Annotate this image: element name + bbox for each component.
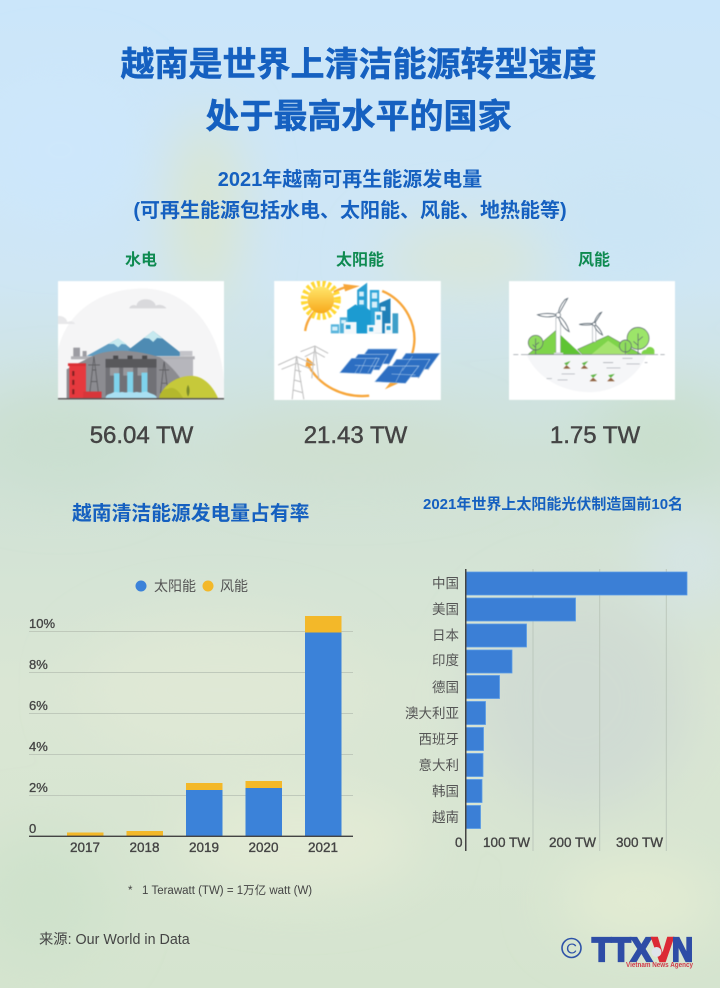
country labels: 中国 bbox=[432, 576, 459, 591]
x axis labels: 2020 bbox=[248, 840, 279, 855]
country labels: 韩国 bbox=[432, 784, 459, 799]
country labels: 德国 bbox=[432, 680, 459, 695]
source: 来源: Our World in Data bbox=[39, 932, 190, 948]
panel: solar power bbox=[274, 251, 442, 449]
heading: share chart: 越南清洁能源发电量占有率 bbox=[72, 503, 309, 525]
y axis labels: 0 bbox=[29, 821, 36, 836]
country labels: 美国 bbox=[432, 602, 459, 617]
bars: wind bbox=[67, 616, 342, 836]
copyright mark bbox=[562, 938, 581, 958]
logo: TTXVN: V bbox=[652, 931, 673, 968]
country labels: 意大利 bbox=[418, 757, 459, 773]
logo: TTXVN: N bbox=[672, 931, 693, 968]
legend: 风能 bbox=[220, 578, 248, 594]
country labels: 西班牙 bbox=[418, 732, 459, 747]
horizontal bar chart: top 10 manufacturers bbox=[405, 569, 688, 851]
icon: hydro dam bbox=[57, 280, 225, 400]
value: wind: 1.75 TW bbox=[550, 422, 640, 449]
heading: top 10 chart: 2021年世界上太阳能光伏制造国前10名 bbox=[423, 496, 683, 513]
x axis labels bbox=[455, 835, 663, 850]
y axis labels: 2% bbox=[29, 780, 48, 795]
country labels: 日本 bbox=[432, 628, 459, 643]
logo: TTXVN bbox=[561, 931, 693, 969]
bars bbox=[466, 572, 687, 828]
country labels: 印度 bbox=[432, 653, 459, 668]
logo: TTXVN: TTX bbox=[592, 931, 652, 968]
x axis labels bbox=[70, 840, 338, 855]
x axis labels: 200 TW bbox=[549, 835, 596, 850]
title bbox=[120, 46, 596, 136]
country labels: 澳大利亚 bbox=[405, 706, 459, 721]
y axis labels: 6% bbox=[29, 698, 48, 713]
icon: wind farm bbox=[508, 280, 676, 400]
y axis labels bbox=[29, 616, 55, 836]
legend bbox=[136, 578, 248, 594]
stacked bar chart: clean energy share bbox=[29, 578, 353, 855]
legend: 太阳能 bbox=[154, 578, 196, 594]
x axis labels: 100 TW bbox=[483, 835, 530, 850]
footnote: * 1 Terawatt (TW) = 1万亿 watt (W) bbox=[128, 885, 312, 897]
x axis labels: 2019 bbox=[189, 840, 219, 855]
bars: solar bbox=[186, 632, 342, 836]
logo: TTXVN: Vietnam News Agency bbox=[626, 962, 693, 969]
title: 越南是世界上清洁能源转型速度 bbox=[120, 46, 596, 84]
subtitle: (可再生能源包括水电、太阳能、风能、地热能等) bbox=[133, 200, 567, 222]
x axis labels: 2017 bbox=[70, 840, 100, 855]
value: solar: 21.43 TW bbox=[304, 422, 407, 449]
y axis labels: 4% bbox=[29, 739, 48, 754]
y axis labels: 10% bbox=[29, 616, 55, 631]
x axis labels: 2018 bbox=[129, 840, 160, 855]
title: 处于最高水平的国家 bbox=[206, 98, 512, 136]
x axis labels: 0 bbox=[455, 835, 463, 850]
panel: wind power bbox=[508, 251, 676, 449]
x axis labels: 2021 bbox=[308, 840, 338, 855]
icon: solar cycle bbox=[274, 280, 442, 400]
heading: solar: 太阳能 bbox=[336, 252, 384, 269]
copyright mark: C bbox=[566, 940, 577, 958]
country labels bbox=[405, 576, 459, 825]
heading: wind: 风能 bbox=[578, 252, 610, 269]
heading: hydro: 水电 bbox=[125, 252, 157, 269]
subtitle bbox=[133, 168, 567, 222]
value: hydro: 56.04 TW bbox=[90, 422, 193, 449]
y axis labels: 8% bbox=[29, 657, 48, 672]
subtitle: 2021年越南可再生能源发电量 bbox=[218, 169, 482, 191]
panel: hydro power bbox=[57, 251, 225, 449]
x axis labels: 300 TW bbox=[616, 835, 663, 850]
country labels: 越南 bbox=[432, 810, 459, 825]
